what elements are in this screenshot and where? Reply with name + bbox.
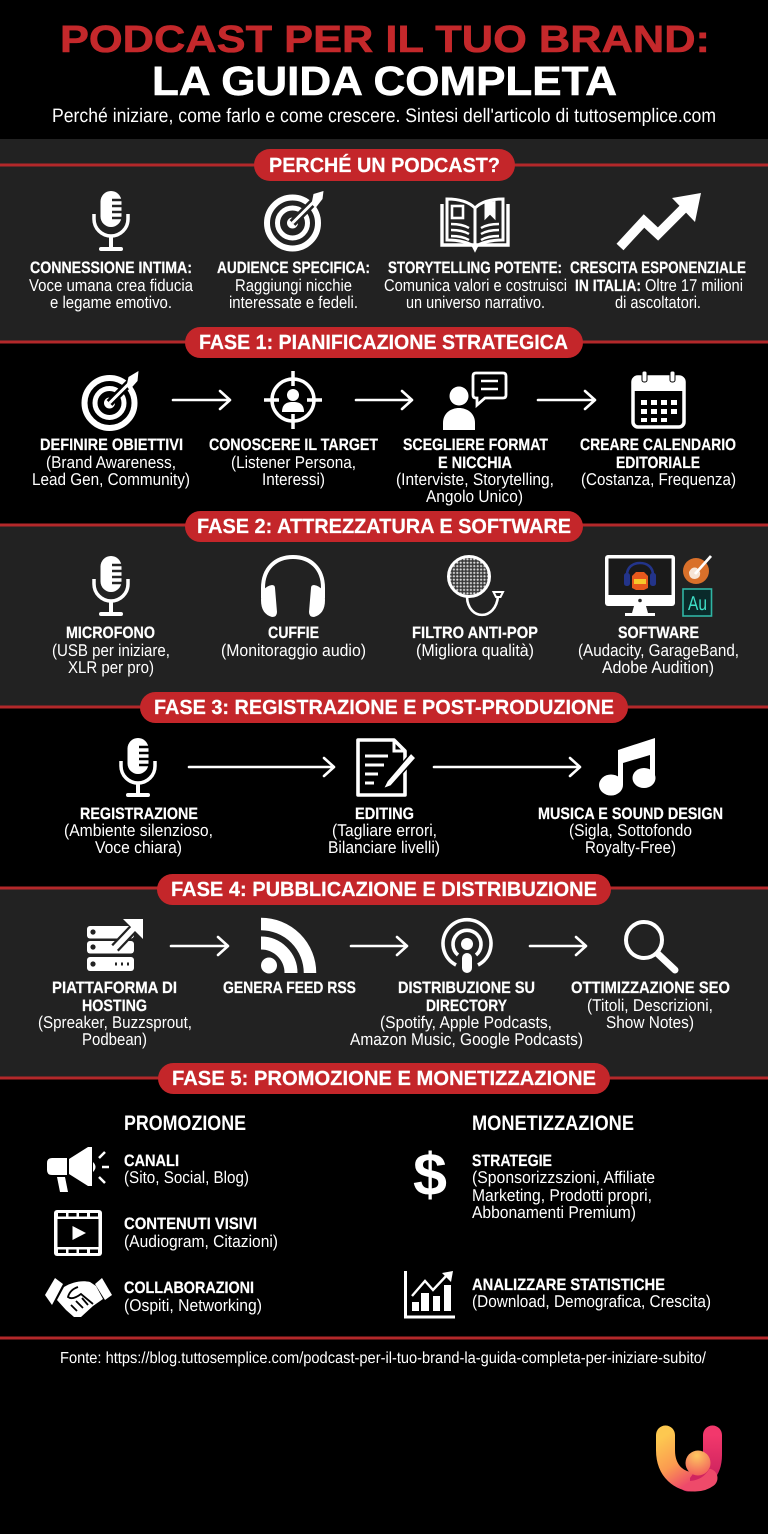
logo	[666, 1435, 712, 1482]
icon: hosting server	[87, 919, 143, 971]
icon: podcast	[443, 920, 491, 973]
text: editing	[328, 805, 440, 857]
panel: fase 3	[0, 692, 768, 857]
text: software: (Audacity, GarageBand,	[578, 641, 739, 660]
icon: calendar	[633, 371, 684, 427]
arrow	[173, 391, 230, 409]
icon: microphone	[94, 556, 128, 616]
text: microfono	[52, 624, 170, 677]
text: ottimizzazione seo: OTTIMIZZAZIONE SEO	[571, 979, 730, 997]
text: ottimizzazione seo	[571, 979, 730, 1032]
text: ottimizzazione seo: (Titoli, Descrizioni,	[587, 996, 713, 1015]
text: storytelling potente: STORYTELLING POTENTE:	[388, 259, 562, 277]
icon: adobe audition: Au	[688, 593, 707, 615]
text: crescita esponenziale	[570, 259, 746, 312]
arrow	[538, 391, 595, 409]
text: distribuzione su directory: Amazon Music, Google Podcasts)	[350, 1030, 583, 1049]
text: strategie: Abbonamenti Premium)	[472, 1203, 636, 1222]
text: piattaforma di hosting: HOSTING	[82, 997, 147, 1015]
text: creare calendario: (Costanza, Frequenza)	[581, 470, 736, 489]
text: conoscere il target: CONOSCERE IL TARGET	[209, 436, 378, 454]
text: connessione intima: e legame emotivo.	[50, 293, 172, 312]
section heading	[254, 149, 515, 181]
text: conoscere il target	[209, 436, 378, 489]
header	[52, 19, 716, 127]
text: collaborazioni: COLLABORAZIONI	[124, 1279, 254, 1297]
text: contenuti visivi	[124, 1215, 278, 1251]
panel: perché un podcast	[0, 139, 768, 342]
text: audience specifica: AUDIENCE SPECIFICA:	[217, 259, 370, 277]
arrow	[356, 391, 412, 409]
text: canali: (Sito, Social, Blog)	[124, 1168, 249, 1187]
arrow	[434, 758, 580, 776]
subtitle: Perché iniziare, come farlo e come crescere. Sintesi dell'articolo di tuttosemplice.com	[52, 105, 716, 127]
text: filtro anti-pop: FILTRO ANTI-POP	[412, 624, 538, 642]
text: distribuzione su directory: (Spotify, Apple Podcasts,	[380, 1013, 552, 1032]
icon: magnifier	[626, 922, 675, 970]
text: storytelling potente: Comunica valori e costruisci	[384, 276, 567, 295]
text: canali: CANALI	[124, 1152, 179, 1170]
icon: pop filter	[448, 556, 503, 615]
text: registrazione: REGISTRAZIONE	[80, 805, 198, 823]
icon: target	[267, 191, 324, 248]
text: ottimizzazione seo: Show Notes)	[606, 1013, 694, 1032]
text: creare calendario: EDITORIALE	[616, 454, 700, 472]
icon: handshake	[45, 1278, 112, 1317]
text: crescita esponenziale: di ascoltatori.	[615, 293, 701, 312]
title line 1: PODCAST PER IL TUO BRAND:	[60, 19, 710, 61]
icon: video film	[54, 1210, 102, 1256]
text: piattaforma di hosting: PIATTAFORMA DI	[52, 979, 177, 997]
text: genera feed rss: GENERA FEED RSS	[223, 979, 356, 997]
text: software: Adobe Audition)	[602, 658, 714, 677]
text: scegliere format	[396, 436, 554, 506]
text: distribuzione su directory: DISTRIBUZIONE SU	[398, 979, 535, 997]
icon: person with chat	[443, 373, 506, 430]
section heading: FASE 2: ATTREZZATURA E SOFTWARE	[197, 515, 571, 538]
text: piattaforma di hosting: Podbean)	[82, 1030, 147, 1049]
title line 2: LA GUIDA COMPLETA	[152, 58, 617, 104]
panel: fase 5	[0, 1063, 768, 1317]
text: musica e sound design	[538, 805, 723, 857]
text: audience specifica: interessate e fedeli.	[229, 293, 358, 312]
text: editing: Bilanciare livelli)	[328, 838, 440, 857]
text: audience specifica	[217, 259, 370, 312]
text: scegliere format: (Interviste, Storytelling,	[396, 470, 554, 489]
text: analizzare statistiche	[472, 1276, 711, 1311]
arrow	[171, 937, 228, 955]
heading: monetizzazione: MONETIZZAZIONE	[472, 1112, 634, 1135]
text: audience specifica: Raggiungi nicchie	[235, 276, 352, 295]
arrow	[189, 758, 334, 776]
heading: promozione: PROMOZIONE	[124, 1112, 246, 1135]
text: registrazione: Voce chiara)	[95, 838, 182, 857]
text: registrazione	[64, 805, 213, 857]
icon: document with pencil	[358, 740, 416, 795]
text: cuffie: (Monitoraggio audio)	[221, 641, 366, 660]
text: editing: (Tagliare errori,	[332, 821, 437, 840]
section heading: FASE 1: PIANIFICAZIONE STRATEGICA	[199, 331, 568, 354]
text: definire obiettivi: Lead Gen, Community)	[32, 470, 190, 489]
text: connessione intima	[29, 259, 193, 312]
text: software: SOFTWARE	[618, 624, 699, 642]
panel: fase 4	[0, 874, 768, 1078]
text: distribuzione su directory: DIRECTORY	[426, 997, 507, 1015]
footer source: Fonte: https://blog.tuttosemplice.com/podcast-per-il-tuo-brand-la-guida-completa-per-iniziare-subito/	[60, 1350, 707, 1367]
text: connessione intima: Voce umana crea fiducia	[29, 276, 193, 295]
text: musica e sound design: (Sigla, Sottofondo	[569, 821, 692, 840]
text: contenuti visivi: (Audiogram, Citazioni)	[124, 1232, 278, 1251]
text: creare calendario	[580, 436, 736, 489]
icon: microphone	[121, 738, 155, 797]
section heading: FASE 5: PROMOZIONE E MONETIZZAZIONE	[172, 1067, 596, 1090]
text: musica e sound design: Royalty-Free)	[585, 838, 676, 857]
text: strategie: (Sponsorizzszioni, Affiliate	[472, 1168, 655, 1187]
text: microfono: (USB per iniziare,	[52, 641, 170, 660]
text: storytelling potente: un universo narrativo.	[406, 293, 545, 312]
text: canali	[124, 1152, 249, 1187]
text: storytelling potente	[384, 259, 567, 312]
text: strategie: STRATEGIE	[472, 1152, 552, 1170]
text: connessione intima: CONNESSIONE INTIMA:	[30, 259, 192, 277]
icon: target	[84, 371, 138, 428]
text: strategie	[472, 1152, 655, 1222]
text: analizzare statistiche: (Download, Demografica, Crescita)	[472, 1292, 711, 1311]
text: conoscere il target: (Listener Persona,	[231, 453, 356, 472]
text: crescita esponenziale: Oltre 17 milioni	[645, 276, 743, 295]
text: definire obiettivi: (Brand Awareness,	[46, 453, 176, 472]
arrow	[530, 937, 586, 955]
icon: growth arrow	[620, 193, 701, 247]
text: musica e sound design: MUSICA E SOUND DESIGN	[538, 805, 723, 823]
text: filtro anti-pop	[412, 624, 538, 660]
text: crescita esponenziale: IN ITALIA:	[575, 277, 641, 295]
panel: fase 2	[0, 511, 768, 707]
icon: dollar: $	[413, 1141, 447, 1208]
text: cuffie: CUFFIE	[268, 624, 319, 642]
text: scegliere format: E NICCHIA	[438, 454, 512, 472]
icon: megaphone	[47, 1147, 109, 1192]
text: microfono: XLR per pro)	[68, 658, 154, 677]
icon: crosshair person	[264, 371, 322, 429]
text: cuffie	[221, 624, 366, 660]
section heading: PERCHÉ UN PODCAST?	[269, 153, 500, 177]
text: creare calendario: CREARE CALENDARIO	[580, 436, 736, 454]
section heading: FASE 3: REGISTRAZIONE E POST-PRODUZIONE	[154, 696, 614, 719]
text: scegliere format: SCEGLIERE FORMAT	[403, 436, 548, 454]
text: collaborazioni	[124, 1279, 262, 1315]
arrow	[351, 937, 407, 955]
icon: open book	[442, 199, 508, 249]
text: editing: EDITING	[355, 805, 414, 823]
text: definire obiettivi: DEFINIRE OBIETTIVI	[40, 436, 183, 454]
text: definire obiettivi	[32, 436, 190, 489]
text: piattaforma di hosting: (Spreaker, Buzzsprout,	[38, 1013, 192, 1032]
text: strategie: Marketing, Prodotti propri,	[472, 1186, 652, 1205]
text: collaborazioni: (Ospiti, Networking)	[124, 1296, 262, 1315]
text: microfono: MICROFONO	[66, 624, 155, 642]
text: piattaforma di hosting	[38, 979, 192, 1049]
icon: headphones	[261, 557, 325, 617]
text: analizzare statistiche: ANALIZZARE STATISTICHE	[472, 1276, 665, 1294]
text: distribuzione su directory	[350, 979, 583, 1049]
text: software	[578, 624, 739, 677]
panel: fase 1	[0, 327, 768, 506]
icon: garageband	[683, 556, 711, 584]
icon: statistics chart	[406, 1271, 455, 1317]
section heading: FASE 4: PUBBLICAZIONE E DISTRIBUZIONE	[171, 878, 597, 901]
icon: microphone	[94, 191, 128, 251]
icon: rss feed	[261, 924, 310, 974]
text: scegliere format: Angolo Unico)	[426, 487, 523, 506]
icon: monitor with software	[605, 555, 712, 616]
icon: music note	[599, 738, 656, 796]
text: registrazione: (Ambiente silenzioso,	[64, 821, 213, 840]
text: conoscere il target: Interessi)	[262, 470, 325, 489]
text: contenuti visivi: CONTENUTI VISIVI	[124, 1215, 257, 1233]
text: filtro anti-pop: (Migliora qualità)	[416, 641, 534, 660]
